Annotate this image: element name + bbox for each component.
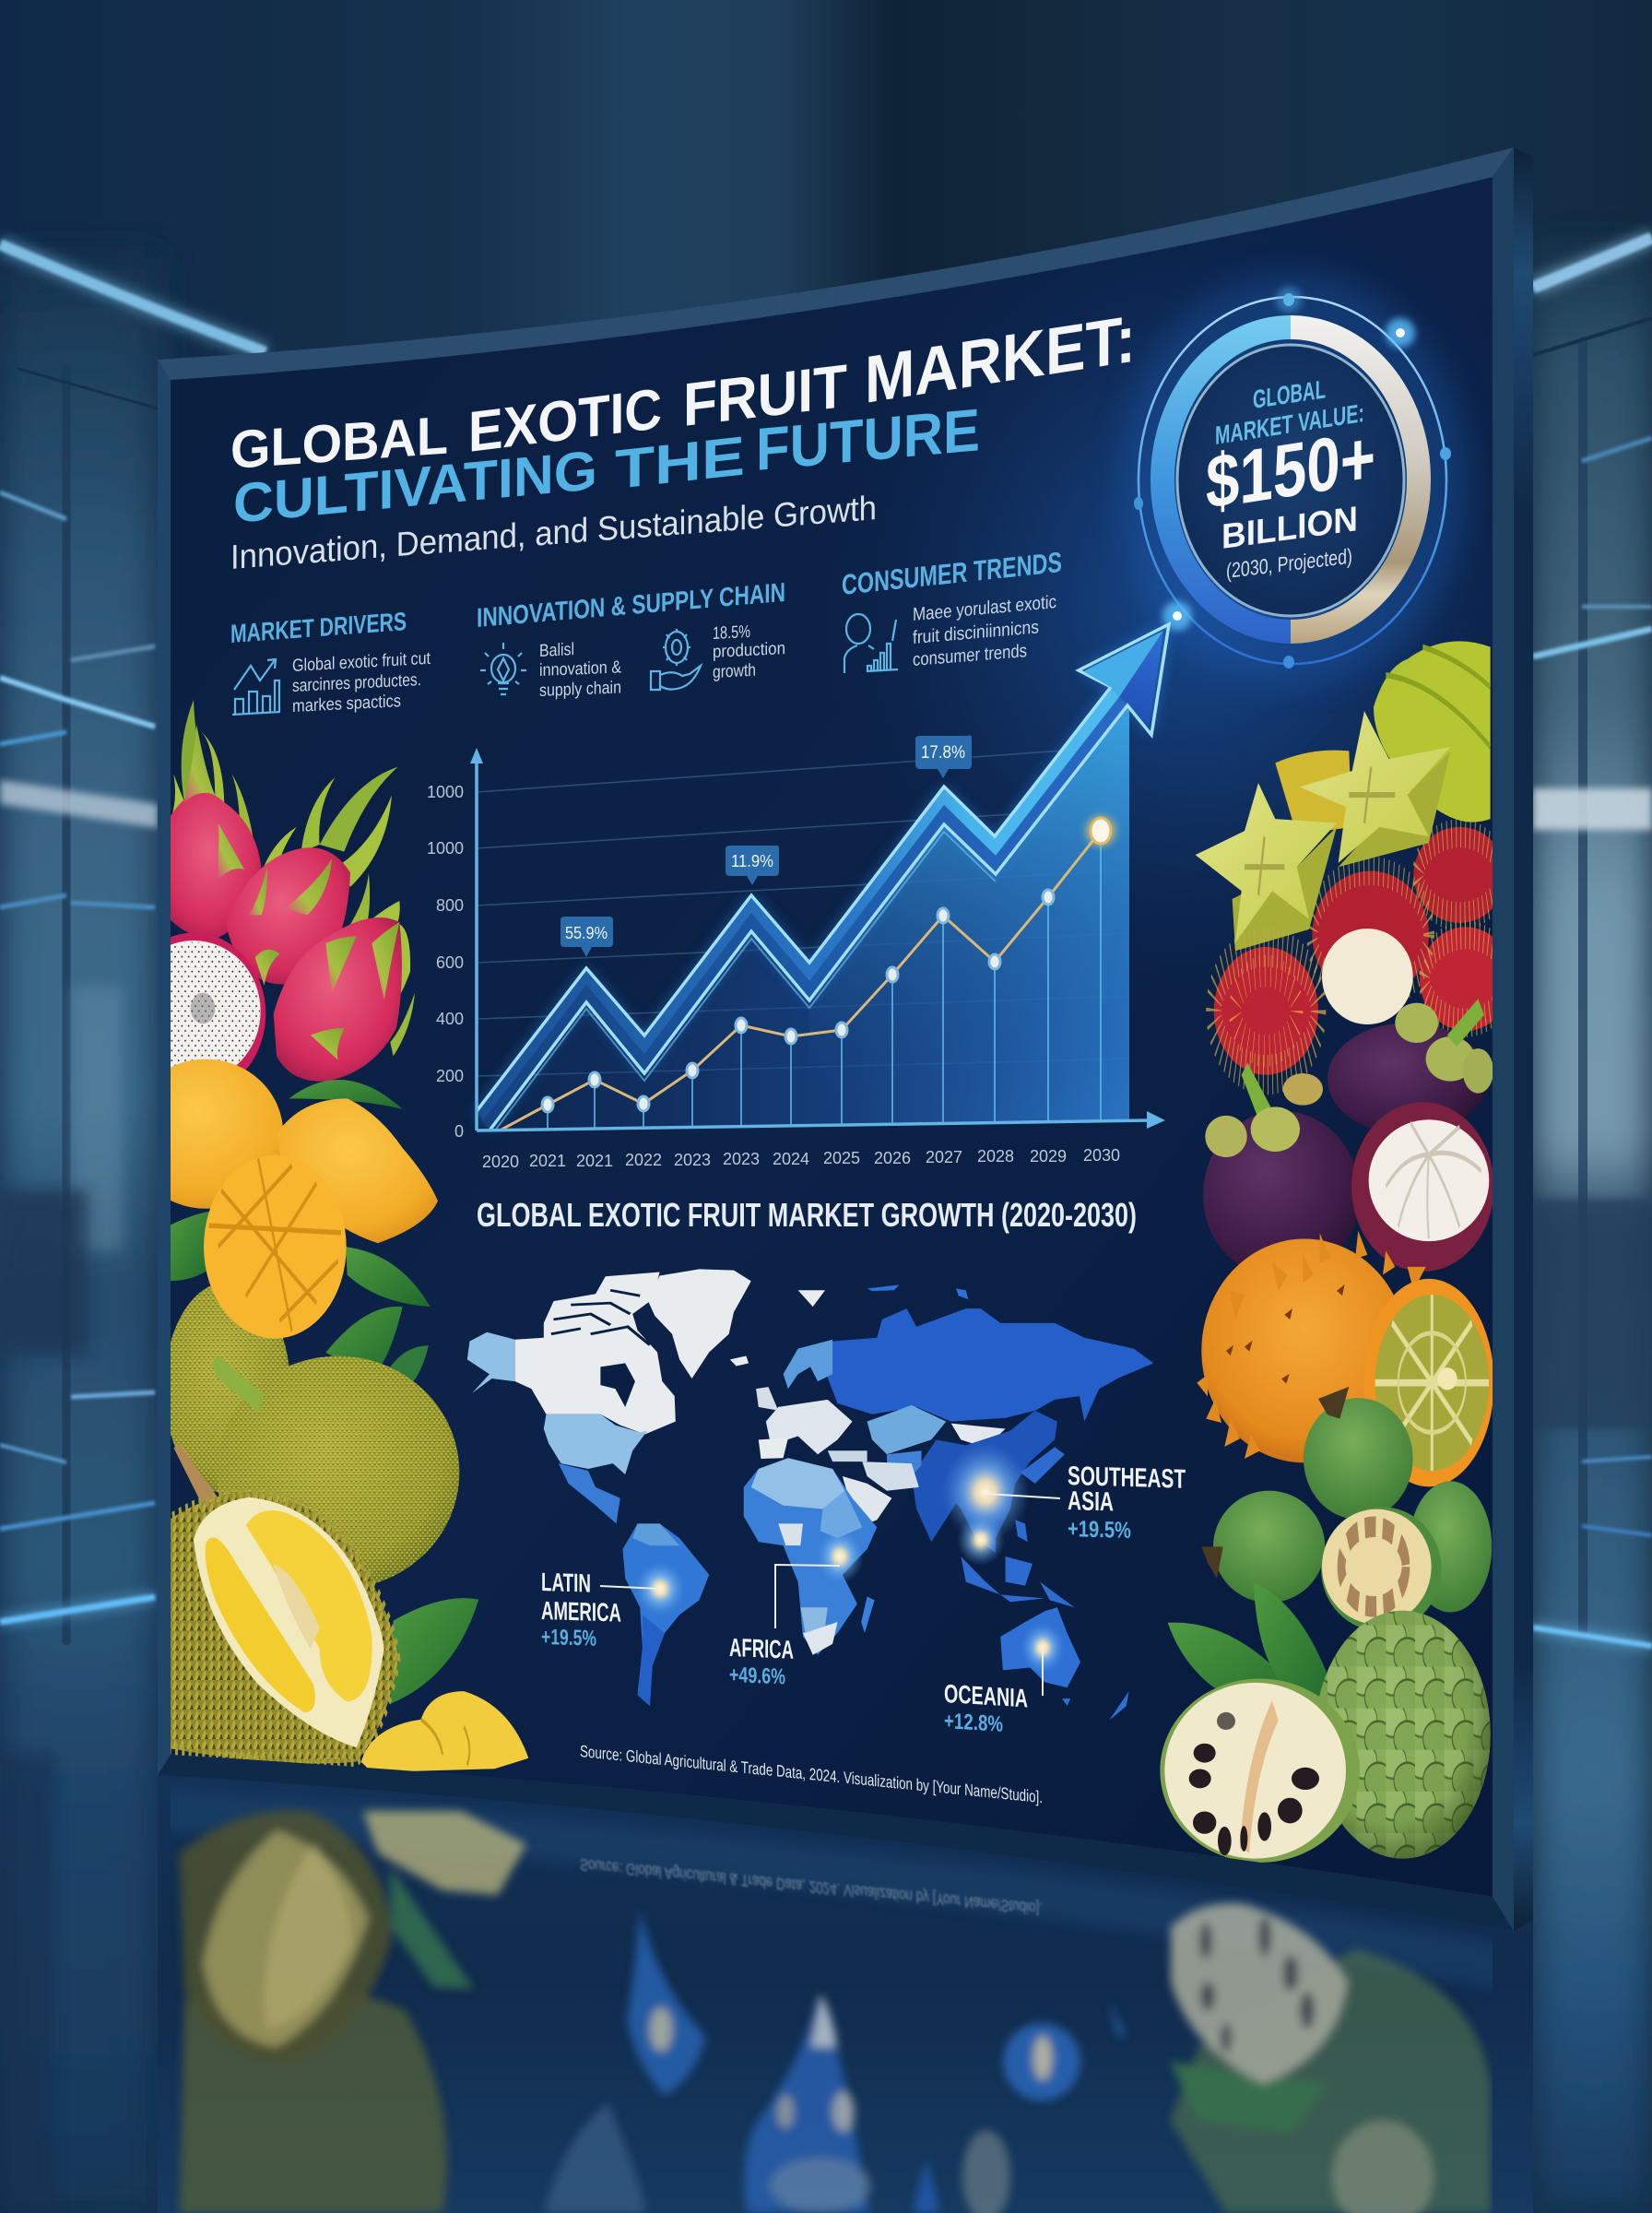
title block: Innovation, Demand, and Sustainable Growth (230, 488, 877, 576)
reflected captions: AMERICA (541, 1982, 621, 2026)
y axis labels: 1000 (427, 783, 464, 801)
label: Africa: AFRICA (729, 1633, 794, 1664)
callout: 11.9%: 11.9% (731, 852, 773, 870)
source note: Source: Global Agricultural & Trade Data, 2024. Visualization by [Your Name/Studio]. (580, 1742, 1043, 1806)
panel: innovation and supply chain: supply chain (539, 678, 621, 701)
x axis labels: 2023 (674, 1151, 711, 1169)
icon: person with chart (844, 614, 898, 673)
ring text: $150+ (1206, 415, 1375, 526)
panel: innovation and supply chain: production (713, 639, 785, 662)
panel: innovation and supply chain (477, 578, 785, 701)
reflected captions: AFRICA (729, 1982, 794, 2022)
world map (467, 1269, 1186, 1737)
chart title: GLOBAL EXOTIC FRUIT MARKET GROWTH (2020-2030) (477, 1196, 1137, 1234)
ring text: (2030, Projected) (1226, 544, 1352, 583)
panel: consumer trends: Maee yorulast exotic (913, 592, 1056, 625)
label: Oceania: OCEANIA (944, 1679, 1028, 1712)
panel: consumer trends: fruit disciniinnicns (913, 617, 1039, 648)
callout: 17.8% (915, 735, 972, 778)
panel: consumer trends (842, 546, 1062, 673)
chart grid (477, 746, 1129, 1076)
chart area fill (490, 705, 1129, 1130)
left fruit column: dragon fruit, mango, jackfruit, durian (122, 700, 528, 1772)
line chart (427, 624, 1169, 1171)
ring text: GLOBAL (1253, 374, 1326, 414)
reflected captions (580, 1858, 1042, 1916)
glowing ceiling and wall light strips (0, 238, 1652, 1646)
callout: 55.9%: 55.9% (565, 924, 608, 942)
display board frame (158, 148, 1533, 1931)
reflected captions: +49.6% (729, 1958, 805, 1997)
zigzag growth arrow (477, 624, 1169, 1130)
y axis labels: 200 (436, 1067, 464, 1085)
x axis labels: 2021 (529, 1152, 566, 1170)
reflected captions: LATIN (541, 2012, 610, 2053)
panel: innovation and supply chain: INNOVATION & SUPPLY CHAIN (477, 578, 785, 633)
y axis labels: 1000 (427, 839, 464, 858)
label: Africa: +49.6% (729, 1663, 785, 1689)
reflected captions: +19.5% (541, 1959, 617, 1998)
panel: innovation and supply chain: 18.5% (713, 622, 750, 644)
value drop lines (548, 831, 1101, 1130)
x axis labels: 2029 (1030, 1147, 1067, 1166)
panel: consumer trends: CONSUMER TRENDS (842, 546, 1062, 601)
ring text: BILLION (1221, 499, 1358, 557)
title block: CULTIVATING (233, 439, 597, 535)
reflected captions: Source: Global Agricultural & Trade Data, 2024. Visualization by [Your Name/Studio]. (580, 1855, 1043, 1919)
floor reflection (158, 1789, 1514, 2213)
end point highlight (1085, 815, 1116, 846)
panel: market drivers: Global exotic fruit cut (292, 649, 431, 676)
callout: 11.9% (726, 846, 779, 885)
panel: innovation and supply chain: growth (713, 661, 756, 682)
y axis labels: 600 (436, 953, 464, 972)
title block (230, 302, 1136, 576)
callout: 17.8%: 17.8% (921, 743, 965, 763)
panel: market drivers (230, 607, 431, 716)
x axis labels: 2024 (773, 1150, 809, 1168)
right fruit column: star fruit, rambutan, mangosteen, kiwano, feijoa, custard apple (1160, 641, 1512, 1863)
panel: market drivers: sarcinres productes. (292, 670, 421, 696)
x axis labels: 2020 (482, 1153, 519, 1171)
region glows (634, 1442, 1065, 1674)
icon: gear and hand (651, 629, 701, 690)
label: Southeast Asia: SOUTHEAST (1068, 1462, 1186, 1495)
label: Southeast Asia (1068, 1462, 1186, 1544)
x axis labels: 2028 (977, 1147, 1014, 1166)
x axis labels: 2027 (926, 1148, 962, 1166)
title block: FRUIT (683, 352, 847, 440)
label: Latin America: +19.5% (541, 1625, 596, 1651)
label: Southeast Asia: +19.5% (1068, 1516, 1131, 1544)
panel: innovation and supply chain: innovation & (539, 657, 621, 680)
x axis labels: 2022 (625, 1151, 662, 1169)
x axis labels: 2021 (576, 1152, 613, 1170)
y axis labels (427, 783, 464, 1141)
icon: light bulb (480, 643, 526, 694)
ring text (1206, 374, 1375, 583)
title block: FUTURE (756, 396, 980, 483)
reflected captions: OCEANIA (944, 1978, 1028, 2021)
label: Southeast Asia: ASIA (1068, 1486, 1114, 1517)
x axis labels: 2026 (874, 1149, 911, 1167)
callout: 55.9% (560, 917, 613, 957)
title block: GLOBAL (230, 406, 448, 480)
icon: rising bar chart (232, 659, 280, 715)
panel: market drivers: markes spactics (292, 692, 401, 716)
gold data line (502, 831, 1101, 1130)
x axis labels: 2023 (723, 1150, 760, 1168)
title block: EXOTIC (468, 377, 662, 465)
reflected frame band (158, 1789, 1514, 1992)
y axis labels: 0 (454, 1122, 464, 1141)
board panel (171, 177, 1493, 1897)
panel: innovation and supply chain: Balisl (539, 640, 574, 661)
data nodes (542, 890, 1054, 1112)
ring text: MARKET VALUE: (1215, 398, 1364, 450)
label: Oceania: +12.8% (944, 1709, 1003, 1737)
label: Latin America (541, 1568, 621, 1651)
label: Oceania (944, 1679, 1028, 1737)
panel: market drivers: MARKET DRIVERS (230, 607, 407, 648)
x axis labels (482, 1146, 1120, 1171)
label: Latin America: AMERICA (541, 1596, 621, 1627)
x axis labels: 2030 (1083, 1146, 1120, 1165)
progress ring (1162, 327, 1419, 632)
y axis labels: 400 (436, 1010, 464, 1028)
leader lines (600, 1494, 1060, 1696)
outer orbit ring with dots (1134, 287, 1451, 669)
x axis labels: 2025 (823, 1149, 860, 1167)
market value ring callout (1117, 272, 1468, 687)
label: Latin America: LATIN (541, 1568, 591, 1598)
panel: consumer trends: consumer trends (913, 641, 1027, 670)
title block: THE (615, 425, 745, 501)
title block: MARKET: (865, 302, 1136, 418)
y axis labels: 800 (436, 896, 464, 915)
label: Africa (729, 1633, 794, 1689)
axes (470, 748, 1165, 1130)
blurred reflected fruit and map (180, 1810, 1491, 2213)
reflected captions: +12.8% (944, 1952, 1020, 1992)
